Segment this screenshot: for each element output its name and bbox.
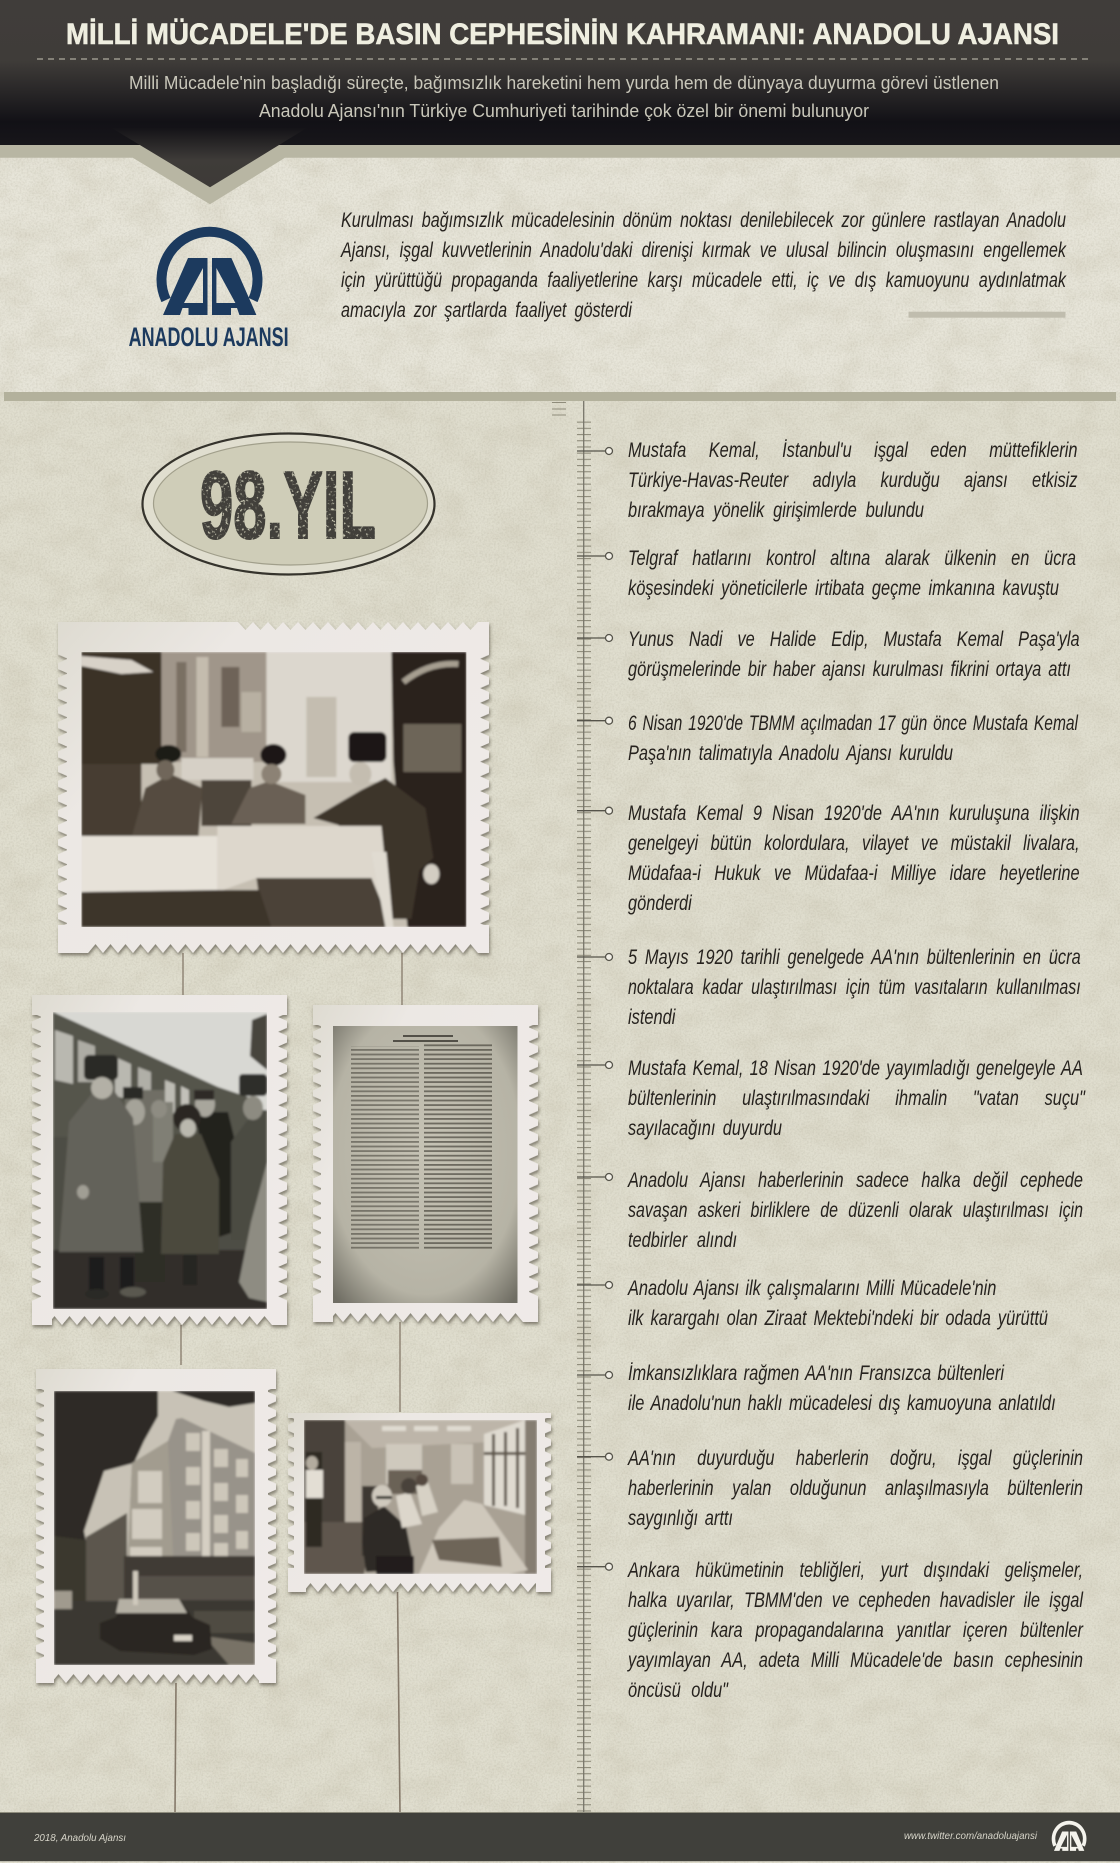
timeline item 7: sayılacağını duyurdu xyxy=(628,1117,782,1140)
hanging strings xyxy=(175,953,402,1812)
intro paragraph: amacıyla zor şartlarda faaliyet gösterdi xyxy=(341,299,632,322)
footer credit: 2018, Anadolu Ajansı xyxy=(33,1832,126,1844)
timeline item 7: Mustafa Kemal, 18 Nisan 1920'de yayımladığı genelgeyle AA xyxy=(628,1057,1083,1080)
timeline item 8 xyxy=(627,1169,1083,1252)
logo: Anadolu Ajansi xyxy=(129,232,289,352)
year badge: 98.YIL xyxy=(142,434,434,574)
section divider band xyxy=(4,392,1116,401)
intro paragraph xyxy=(340,209,1066,322)
timeline item 3: görüşmelerinde bir haber ajansı kurulması fikrini ortaya attı xyxy=(628,658,1071,681)
timeline item 5: gönderdi xyxy=(628,892,692,915)
timeline item 1: Türkiye-Havas-Reuter adıyla kurduğu ajansı etkisiz xyxy=(628,469,1077,492)
subtitle: Milli Mücadele'nin başladığı süreçte, bağımsızlık hareketini hem yurda hem de dünyaya duyurma görevi üstlenen xyxy=(129,72,999,93)
timeline item 3: Yunus Nadi ve Halide Edip, Mustafa Kemal Paşa'yla xyxy=(628,628,1080,651)
timeline item 12: yayımlayan AA, adeta Milli Mücadele'de basın cephesinin xyxy=(628,1649,1083,1672)
header band xyxy=(0,0,1120,204)
timeline item 6 xyxy=(628,946,1081,1029)
timeline item 6: noktalara kadar ulaştırılması için tüm vasıtaların kullanılması xyxy=(628,976,1081,999)
timeline item 12: halka uyarılar, TBMM'den ve cepheden havadisler ile işgal xyxy=(628,1589,1083,1612)
photo: Atatürk with Latife Hanım by the train xyxy=(32,995,287,1325)
photo: Anadolu Ajansi building xyxy=(36,1369,276,1683)
subtitle xyxy=(129,72,999,121)
subtitle: Anadolu Ajansı'nın Türkiye Cumhuriyeti tarihinde çok özel bir önemi bulunuyor xyxy=(259,100,869,121)
title: MİLLİ MÜCADELE'DE BASIN CEPHESİNİN KAHRAMANI: ANADOLU AJANSI xyxy=(66,18,1059,51)
timeline item 11: AA'nın duyurduğu haberlerin doğru, işgal güçlerinin xyxy=(628,1447,1083,1470)
timeline item 5: Mustafa Kemal 9 Nisan 1920'de AA'nın kuruluşuna ilişkin xyxy=(628,802,1080,825)
timeline item 9: ilk karargahı olan Ziraat Mektebi'ndeki bir odada yürüttü xyxy=(628,1307,1048,1330)
timeline item 12: güçlerinin kara propagandalarına yanıtlar içeren bültenler xyxy=(628,1619,1083,1642)
timeline item 11 xyxy=(627,1447,1083,1530)
timeline item 12: Ankara hükümetinin tebliğleri, yurt dışındaki gelişmeler, xyxy=(628,1559,1083,1582)
timeline item 4: Paşa'nın talimatıyla Anadolu Ajansı kuruldu xyxy=(628,742,953,765)
footer bar xyxy=(0,1812,1120,1861)
photo: historic French-language bulletin xyxy=(313,1005,538,1322)
timeline item 11: haberlerinin yalan olduğunun anlaşılmasıyla bültenlerin xyxy=(628,1477,1083,1500)
timeline item 12: öncüsü oldu" xyxy=(628,1679,728,1702)
timeline item 8: Anadolu Ajansı haberlerinin sadece halka değil cephede xyxy=(628,1169,1083,1192)
timeline item 10 xyxy=(628,1362,1056,1415)
timeline item 7: bültenlerinin ulaştırılmasındaki ihmalin "vatan suçu" xyxy=(628,1087,1085,1110)
timeline item 5: Müdafaa-i Hukuk ve Müdafaa-i Milliye idare heyetlerine xyxy=(628,862,1080,885)
dashed divider xyxy=(37,58,1089,60)
intro paragraph: Ajansı, işgal kuvvetlerinin Anadolu'daki direnişi kırmak ve ulusal bilincin oluşmasını engellemek xyxy=(341,239,1066,262)
timeline markers xyxy=(577,448,612,1570)
timeline item 5: genelgeyi bütün kolordulara, vilayet ve müstakil livalara, xyxy=(628,832,1080,855)
timeline item 1: bırakmaya yönelik girişimlerde bulundu xyxy=(628,499,924,522)
intro accent bar xyxy=(908,312,1066,318)
intro paragraph: için yürüttüğü propaganda faaliyetlerine karşı mücadele etti, iç ve dış kamuoyunu aydınlatmak xyxy=(341,269,1066,292)
timeline item 5 xyxy=(628,802,1080,915)
timeline item 2: köşesindeki yöneticilerle irtibata geçme imkanına kavuştu xyxy=(628,577,1059,600)
footer logo xyxy=(1053,1823,1085,1851)
timeline item 9: Anadolu Ajansı ilk çalışmalarını Milli Mücadele'nin xyxy=(628,1277,996,1300)
timeline item 8: tedbirler alındı xyxy=(628,1229,737,1252)
logo: Anadolu Ajansi: ANADOLU AJANSI xyxy=(129,322,289,352)
footer link: www.twitter.com/anadoluajansi xyxy=(904,1830,1038,1842)
timeline item 7 xyxy=(628,1057,1086,1140)
intro paragraph: Kurulması bağımsızlık mücadelesinin dönüm noktası denilebilecek zor günlere rastlayan Anadolu xyxy=(341,209,1066,232)
timeline item 11: saygınlığı arttı xyxy=(628,1507,733,1530)
timeline item 2: Telgraf hatlarını kontrol altına alarak ülkenin en ücra xyxy=(628,547,1076,570)
timeline item 1: Mustafa Kemal, İstanbul'u işgal eden müttefiklerin xyxy=(628,439,1077,462)
timeline item 9 xyxy=(627,1277,1048,1330)
timeline item 6: istendi xyxy=(628,1006,675,1029)
photo: Atatürk at the table with officers xyxy=(58,622,489,953)
timeline item 4 xyxy=(628,712,1078,765)
timeline ruler xyxy=(552,401,591,1812)
timeline item 10: İmkansızlıklara rağmen AA'nın Fransızca bültenleri xyxy=(628,1362,1004,1385)
photo: newsroom with teleprinters xyxy=(288,1413,551,1592)
timeline item 10: ile Anadolu'nun haklı mücadelesi dış kamuoyuna anlatıldı xyxy=(628,1392,1056,1415)
timeline item 4: 6 Nisan 1920'de TBMM açılmadan 17 gün önce Mustafa Kemal xyxy=(628,712,1078,735)
timeline item 8: savaşan askeri birliklere de düzenli olarak ulaştırılması için xyxy=(628,1199,1083,1222)
year badge: 98.YIL: 98.YIL xyxy=(200,452,376,559)
timeline item 6: 5 Mayıs 1920 tarihli genelgede AA'nın bültenlerinin en ücra xyxy=(628,946,1081,969)
timeline item 1 xyxy=(628,439,1078,522)
timeline item 3 xyxy=(628,628,1080,681)
timeline item 2 xyxy=(628,547,1076,600)
timeline item 12 xyxy=(627,1559,1084,1702)
